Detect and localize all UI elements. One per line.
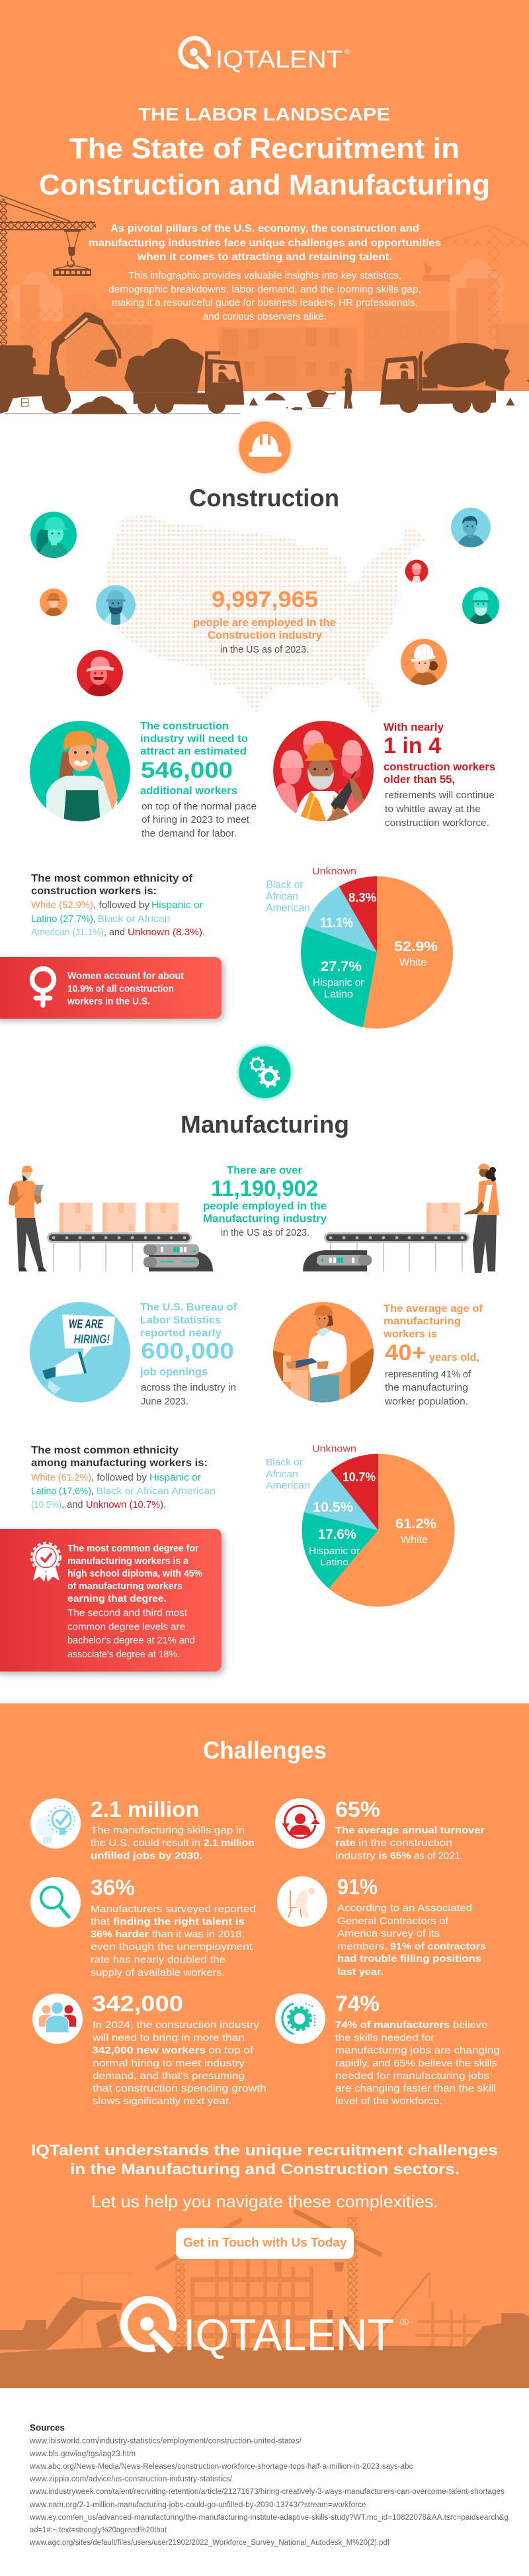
stat: 74% of manufacturers: 74% of manufacturers — [335, 2019, 450, 2031]
pie chart: manufacturing ethnicity: Unknown — [312, 1443, 356, 1455]
pie chart: manufacturing ethnicity: Hispanic or — [309, 1545, 360, 1557]
panel: challenges — [0, 1704, 529, 2388]
pie chart: construction ethnicity — [266, 866, 453, 1029]
pie chart: manufacturing ethnicity: Latino — [320, 1557, 348, 1568]
pie chart: construction ethnicity: Black or — [266, 878, 304, 891]
heading: manufacturing: Manufacturing — [181, 1111, 349, 1138]
illustration: left conveyor and worker — [9, 1166, 213, 1271]
illustration: right conveyor and worker — [303, 1164, 499, 1273]
intro text: making it a resourceful guide for business leaders, HR professionals, — [112, 297, 418, 308]
stat: 36% harder: 36% harder — [91, 1929, 149, 1940]
pie chart: manufacturing ethnicity: 17.6% — [318, 1527, 356, 1542]
sources — [29, 2422, 509, 2547]
stat: 9,997,965 employed: Construction industry — [208, 629, 323, 641]
pie chart: construction ethnicity: African — [266, 890, 298, 903]
skyline background — [0, 225, 529, 391]
text: manufacturing ethnicity summary: Black or African American — [97, 1485, 216, 1497]
icon: gears — [238, 1045, 292, 1099]
stat: 2.1 million — [30, 1797, 255, 1861]
stat: 600,000 job openings: across the industry in — [141, 1382, 236, 1393]
stat: 1 in 4 older than 55: With nearly — [384, 721, 444, 733]
stat: average age 40+: the manufacturing — [385, 1382, 468, 1393]
icon: worker portrait blue man — [451, 508, 491, 548]
closing statement: in the Manufacturing and Construction sectors. — [70, 2160, 460, 2178]
text: construction ethnicity summary: White (52.9%) — [31, 899, 93, 911]
excavator and trucks silhouettes left — [0, 312, 258, 414]
stat: 74% of manufacturers: rapidly, and 65% believe the skills — [335, 2058, 497, 2069]
crane — [0, 195, 96, 347]
text: construction ethnicity summary — [31, 873, 205, 938]
stat: 11,190,902 employed — [203, 1164, 327, 1238]
stat: 9,997,965 employed: in the US as of 2023. — [220, 644, 309, 655]
stat: 342,000 workers — [32, 1991, 266, 2107]
text: manufacturing ethnicity summary: The most common ethnicity — [31, 1445, 179, 1456]
illustration: woman worker in teal circle — [30, 721, 130, 824]
stat: average age 40+: manufacturing — [384, 1316, 461, 1327]
panel: header — [0, 0, 529, 414]
icon: worker portrait orange woman — [401, 639, 447, 686]
stat: 342,000 workers: normal hiring to meet industry — [93, 2058, 245, 2069]
text: manufacturing ethnicity summary: , and — [61, 1499, 83, 1510]
callout: most common degree: high school diploma, with 45% — [67, 1568, 202, 1579]
stat: 9,997,965 employed — [193, 587, 336, 655]
callout: women in construction: 10.9% of all construction — [67, 984, 174, 994]
stat: 91% contractors: members, — [337, 1941, 387, 1953]
text: construction ethnicity summary: , and — [104, 927, 125, 938]
closing skyline — [0, 2211, 529, 2388]
stat: 91% contractors: had trouble filling positions — [337, 1953, 481, 1964]
stat: average age 40+: representing 41% of — [385, 1369, 471, 1380]
text: manufacturing ethnicity summary — [31, 1445, 216, 1510]
stat: 1 in 4 older than 55: older than 55, — [384, 773, 455, 786]
sources: www.abc.org/News-Media/News-Releases/construction-workforce-shortage-tops-half-a-million-in-2023-says-abc — [29, 2463, 413, 2471]
stat: 91% contractors: According to an Associated — [337, 1902, 472, 1914]
stat: 546,000 additional workers: the demand for labor. — [142, 828, 237, 839]
stat: 74% of manufacturers: the skills needed for — [335, 2032, 434, 2044]
icon: worker portrait small red — [405, 560, 428, 583]
callout: most common degree: The most common degree for — [67, 1543, 199, 1554]
worker with tablet — [9, 1166, 47, 1271]
text: construction ethnicity summary: American (11.1%) — [31, 927, 104, 938]
logo: IQTalent footer — [124, 2299, 409, 2360]
pie chart: construction ethnicity: 11.1% — [320, 915, 353, 931]
stat: 65% turnover: in the construction — [358, 1837, 452, 1849]
stat: 342,000 workers: 342,000 new workers — [92, 2045, 206, 2056]
stat: 11,190,902 employed: Manufacturing industry — [203, 1213, 327, 1224]
pie chart: manufacturing ethnicity: American — [266, 1480, 310, 1491]
stat: 11,190,902 employed: in the US as of 2023. — [221, 1227, 309, 1238]
stat: average age 40+: years old, — [429, 1351, 479, 1363]
illustration: worker group in red circle — [273, 721, 374, 824]
logo: IQTalent footer: ® — [400, 2317, 409, 2327]
stat: 91% contractors: last year. — [337, 1966, 384, 1978]
sources: www.zippia.com/advice/us-construction-industry-statistics/ — [29, 2475, 233, 2483]
stat: 342,000 workers: 342,000 — [92, 1991, 183, 2016]
stat: 600,000 job openings: 600,000 — [141, 1338, 234, 1363]
stat: 36% harder: supply of available workers. — [91, 1967, 225, 1978]
stat: 36% harder: 36% — [91, 1875, 135, 1900]
stat: 65% turnover: The average annual turnover — [335, 1825, 485, 1836]
stat: 2.1 million: unfilled jobs by 2030. — [91, 1851, 202, 1861]
intro text: demographic breakdowns, labor demand, and the looming skills gap, — [108, 284, 421, 295]
stat: 600,000 job openings — [140, 1302, 237, 1407]
stat: 1 in 4 older than 55: construction workforce. — [385, 817, 489, 829]
text: construction ethnicity summary: construction workers is: — [31, 886, 157, 897]
stat: 65% turnover: is 65% — [378, 1851, 411, 1861]
stat: 74% of manufacturers: manufacturing jobs are changing — [335, 2045, 500, 2056]
text: construction ethnicity summary: , followed by — [93, 899, 149, 911]
stat: 600,000 job openings: The U.S. Bureau of — [140, 1302, 237, 1313]
pie chart: manufacturing ethnicity: African — [266, 1469, 298, 1480]
icon: magnifier — [41, 1887, 69, 1917]
stat: 342,000 workers: In 2024, the construction industry — [93, 2019, 260, 2031]
stat: 74% of manufacturers — [275, 1991, 500, 2107]
heading: the labor landscape: THE LABOR LANDSCAPE — [138, 104, 390, 124]
stat: 600,000 job openings: reported nearly — [140, 1328, 222, 1339]
stat: 11,190,902 employed: There are over — [227, 1164, 302, 1177]
stat: 1 in 4 older than 55: to whittle away at the — [385, 804, 481, 815]
icon: worker portrait teal bearded — [462, 587, 499, 625]
stat: 9,997,965 employed: 9,997,965 — [212, 587, 318, 612]
logo: IQTalent header — [181, 38, 350, 73]
text: construction ethnicity summary: Black or African — [98, 913, 171, 925]
pie chart: manufacturing ethnicity: Black or — [266, 1457, 303, 1468]
icon: people group — [39, 2002, 76, 2033]
stat: 36% harder: that — [91, 1916, 110, 1927]
stat: 600,000 job openings: June 2023. — [141, 1396, 188, 1407]
stat: 1 in 4 older than 55: retirements will continue — [385, 790, 495, 801]
stat: 36% harder: Manufacturers surveyed reported — [91, 1904, 256, 1915]
illustration: we are hiring megaphone — [30, 1302, 130, 1403]
pie chart: manufacturing ethnicity: White — [401, 1534, 428, 1545]
text: manufacturing ethnicity summary: (10.5%) — [31, 1499, 61, 1510]
stat: 546,000 additional workers: industry will need to — [140, 733, 248, 745]
intro text: As pivotal pillars of the U.S. economy, the construction and — [110, 223, 419, 234]
stat: 36% harder — [30, 1875, 256, 1978]
stat: 600,000 job openings: Labor Statistics — [140, 1314, 221, 1326]
pie chart: construction ethnicity: Latino — [324, 989, 353, 1000]
pie chart: manufacturing ethnicity: 10.5% — [313, 1500, 353, 1515]
text: manufacturing ethnicity summary: Unknown (10.7%) — [86, 1499, 163, 1510]
pie chart: manufacturing ethnicity: 61.2% — [395, 1516, 436, 1532]
heading: construction: Construction — [189, 484, 339, 512]
stat: 1 in 4 older than 55: construction workers — [384, 760, 495, 773]
heading: challenges: Challenges — [203, 1737, 327, 1764]
title: The State of Recruitment in — [69, 132, 460, 165]
callout: most common degree: associate's degree at 18%. — [67, 1649, 180, 1660]
stat: 65% turnover: industry — [335, 1851, 376, 1861]
stat: 91% contractors: 91% — [337, 1874, 378, 1899]
text: construction ethnicity summary: Unknown (8.3%) — [128, 927, 202, 938]
logo: IQTalent header: IQTALENT — [216, 46, 343, 73]
title: Construction and Manufacturing — [39, 169, 490, 201]
pie chart: construction ethnicity: Hispanic or — [313, 977, 364, 989]
text: manufacturing ethnicity summary: , — [91, 1485, 94, 1497]
callout: women in construction: Women account for about — [67, 970, 184, 982]
text: construction ethnicity summary: , — [93, 913, 96, 925]
stat: 546,000 additional workers: on top of the normal pace — [142, 801, 257, 812]
stat: 1 in 4 older than 55 — [384, 721, 495, 829]
icon: hard hat — [238, 421, 291, 474]
stat: 36% harder: finding the right talent is — [113, 1916, 245, 1927]
stat: 91% contractors: America survey of its — [337, 1928, 440, 1939]
icon: female symbol — [32, 969, 54, 1005]
intro text: and curious observers alike. — [203, 311, 327, 322]
sources: www.industryweek.com/talent/recruiting-retention/article/21271673/hiring-creatively-3-ways-manufacturers-can-overcome-talent-shortages — [29, 2488, 505, 2496]
stat: average age 40+: 40+ — [385, 1340, 426, 1365]
intro text: when it comes to attracting and retaining talent. — [137, 252, 392, 263]
intro text: manufacturing industries face unique challenges and opportunities — [89, 238, 441, 249]
icon: worker portrait teal woman — [30, 512, 77, 559]
stat: 2.1 million: the U.S. could result in — [91, 1837, 200, 1849]
stat: 600,000 job openings: job openings — [140, 1365, 208, 1378]
sources: www.ey.com/en_us/advanced-manufacturing/the-manufacturing-institute-adaptive-skills-study?WT.mc_id=10822078&AA.tsrc=paidsearch&g — [29, 2514, 509, 2522]
stat: 74% of manufacturers: needed for manufacturing jobs — [335, 2070, 489, 2082]
closing statement: IQTalent understands the unique recruitment challenges — [31, 2142, 498, 2159]
icon: gear with arrows — [282, 2003, 315, 2034]
title — [39, 132, 490, 201]
pie chart: construction ethnicity: 27.7% — [321, 959, 362, 974]
callout: most common degree: manufacturing workers is a — [67, 1555, 189, 1567]
sources: www.nam.org/2-1-million-manufacturing-jobs-could-go-unfilled-by-2030-13743/?stream=workforce — [29, 2501, 366, 2509]
stat: 11,190,902 employed: people employed in the — [203, 1199, 327, 1213]
callout: most common degree: common degree levels are — [67, 1622, 185, 1632]
stat: 342,000 workers: demand, and that's presuming — [93, 2070, 245, 2082]
stat: 546,000 additional workers: The construction — [140, 721, 229, 732]
callout: most common degree: of manufacturing workers — [67, 1581, 183, 1592]
stat: 65% turnover: rate — [335, 1837, 356, 1849]
icon: bulb and check gear — [36, 1806, 75, 1843]
logo: IQTalent header: ® — [345, 48, 350, 55]
sources: www.agc.org/sites/default/files/users/user21902/2022_Workforce_Survey_National_Autodesk_M%20(2).pdf — [29, 2539, 390, 2547]
icon: worker portrait red man — [77, 650, 123, 697]
intro text: This infographic provides valuable insights into key statistics, — [128, 270, 401, 281]
stat: average age 40+: The average age of — [384, 1303, 483, 1314]
text: manufacturing ethnicity summary: . — [163, 1499, 166, 1510]
text: manufacturing ethnicity summary: Hispanic or — [149, 1472, 201, 1483]
sources: www.ibisworld.com/industry-statistics/employment/construction-united-states/ — [29, 2437, 302, 2445]
text: construction ethnicity summary: The most common ethnicity of — [31, 873, 193, 884]
illustration: manufacturing woman with tablet — [272, 1302, 374, 1406]
button: get in touch: Get in Touch with Us Today — [183, 2236, 347, 2250]
icon: ribbon badge — [32, 1543, 61, 1582]
icon: worker portrait small orange — [40, 588, 67, 617]
pie chart: construction ethnicity: American — [266, 901, 310, 914]
callout: women in construction: workers in the U.S. — [67, 995, 150, 1007]
closing statement — [31, 2142, 498, 2211]
button: get in touch — [176, 2228, 354, 2259]
stat: 65% turnover — [275, 1797, 485, 1861]
text: manufacturing ethnicity summary: , followed by — [91, 1472, 147, 1483]
intro text — [89, 223, 441, 322]
stat: 342,000 workers: on top of — [208, 2045, 254, 2056]
mixer truck, worker, wheelbarrow — [264, 340, 529, 413]
text: manufacturing ethnicity summary: White (61.2%) — [31, 1472, 91, 1483]
sources: ad=1#:~:text=strongly%20agreed%20that — [30, 2526, 167, 2534]
stat: 546,000 additional workers: attract an estimated — [140, 746, 247, 757]
stat: 546,000 additional workers: 546,000 — [141, 758, 233, 783]
callout: most common degree: The second and third most — [67, 1607, 188, 1619]
map: dotted USA — [99, 510, 430, 715]
stat: 9,997,965 employed: people are employed in the — [193, 616, 336, 629]
pie chart: manufacturing ethnicity — [266, 1443, 454, 1607]
callout: most common degree: bachelor's degree at 21% and — [67, 1635, 195, 1646]
pie chart: construction ethnicity: 52.9% — [394, 939, 438, 954]
text: manufacturing ethnicity summary: among manufacturing workers is: — [31, 1457, 208, 1469]
stat: 342,000 workers: that construction spending growth — [93, 2083, 266, 2094]
stat: 546,000 additional workers: of hiring in 2023 to meet — [142, 814, 250, 825]
stat: average age 40+ — [383, 1303, 483, 1407]
pie chart: construction ethnicity: 8.3% — [348, 891, 376, 905]
stat: 1 in 4 older than 55: 1 in 4 — [384, 733, 441, 759]
stat: 74% of manufacturers: believe — [453, 2019, 487, 2031]
text: construction ethnicity summary: Hispanic or — [151, 899, 203, 911]
stat: 36% harder: than it was in 2018, — [152, 1929, 245, 1940]
pie chart: construction ethnicity: Unknown — [312, 866, 356, 877]
text: manufacturing ethnicity summary: Latino (17.6%) — [31, 1485, 91, 1497]
stat: 11,190,902 employed: 11,190,902 — [211, 1176, 318, 1201]
stat: 91% contractors: 91% of contractors — [390, 1941, 486, 1953]
stat: 74% of manufacturers: are changing faster than the skill — [335, 2083, 496, 2094]
illustration: we are hiring megaphone: WE ARE — [69, 1317, 103, 1331]
stat: 74% of manufacturers: level of the workforce. — [335, 2095, 442, 2107]
text: construction ethnicity summary: . — [202, 927, 205, 938]
sources: Sources — [30, 2422, 65, 2433]
pie chart: construction ethnicity: White — [399, 957, 427, 968]
stat: 2.1 million: 2.1 million — [204, 1837, 255, 1849]
stat: 36% harder: rate has nearly doubled the — [91, 1954, 225, 1966]
text: construction ethnicity summary: Latino (27.7%) — [31, 913, 93, 925]
icon: worker portrait blue bearded — [96, 585, 136, 625]
stat: 65% turnover: 65% — [335, 1797, 380, 1821]
worker woman — [464, 1164, 499, 1273]
callout: most common degree — [0, 1529, 224, 1675]
stat: 2.1 million: 2.1 million — [91, 1797, 199, 1821]
stat: 91% contractors: General Contractors of — [337, 1915, 449, 1927]
logo: IQTalent footer: IQTALENT — [183, 2310, 394, 2360]
stat: 36% harder: even though the unemployment — [91, 1941, 253, 1953]
stat: 546,000 additional workers — [140, 721, 257, 839]
illustration: we are hiring megaphone: HIRING! — [74, 1332, 110, 1346]
stat: 2.1 million: The manufacturing skills gap in — [91, 1825, 245, 1836]
callout: most common degree: earning that degree. — [67, 1593, 167, 1604]
stat: average age 40+: worker population. — [384, 1396, 468, 1407]
stat: 546,000 additional workers: additional workers — [140, 784, 237, 797]
stat: 91% contractors — [277, 1874, 486, 1978]
sources: www.bls.gov/iag/tgs/iag23.htm — [29, 2450, 136, 2458]
pie chart: manufacturing ethnicity: 10.7% — [343, 1471, 376, 1485]
stat: 342,000 workers: will need to bring in more than — [92, 2032, 245, 2044]
closing statement: Let us help you navigate these complexities. — [91, 2191, 438, 2211]
icon: person with turnover arrows — [282, 1806, 320, 1838]
stat: 65% turnover: as of 2021. — [414, 1851, 463, 1861]
stat: 342,000 workers: slows significantly next year. — [93, 2095, 231, 2107]
callout: women in construction — [0, 957, 224, 1021]
icon: stressed person on chair — [288, 1888, 315, 1917]
stat: 74% of manufacturers: 74% — [335, 1991, 380, 2016]
stat: average age 40+: workers is — [383, 1329, 437, 1340]
